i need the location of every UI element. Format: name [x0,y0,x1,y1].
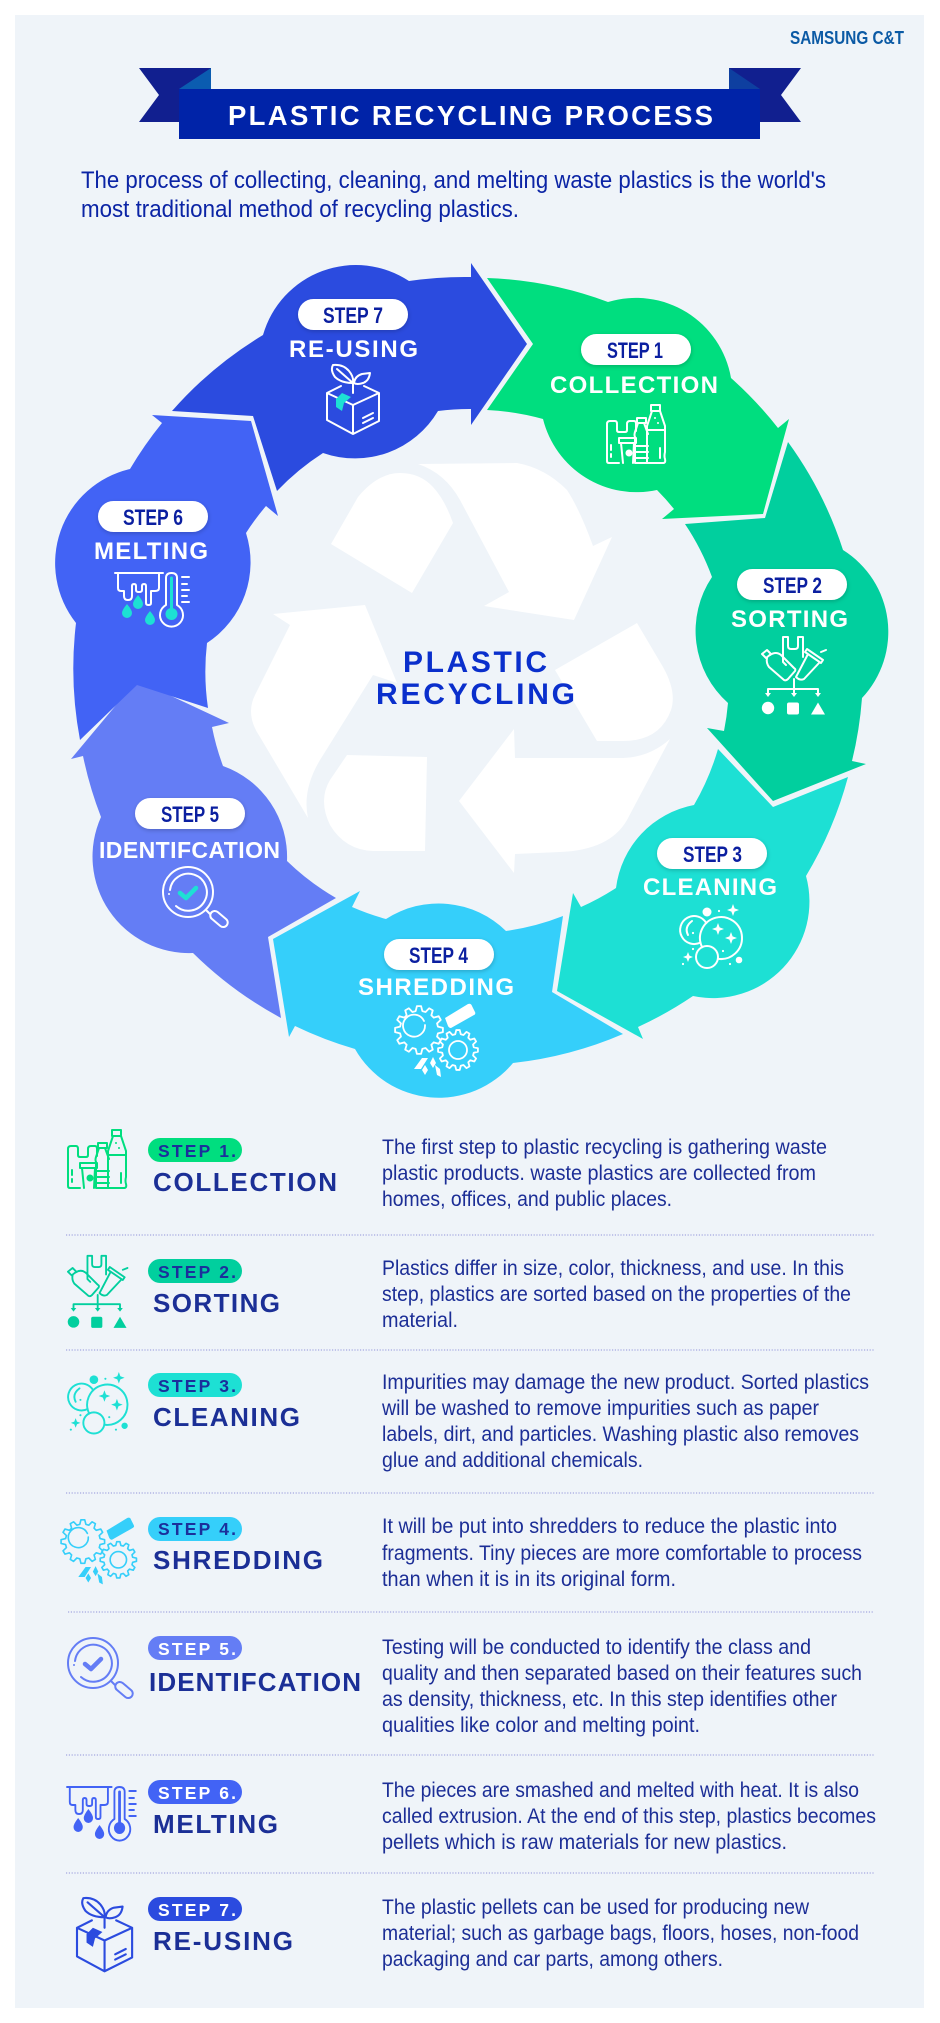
description [382,1636,862,1737]
ribbon fold left [179,68,211,89]
icon: re-using [77,1898,132,1971]
description: Plastics differ in size, color, thickness, and use. In this [382,1257,844,1280]
description [381,1371,869,1472]
center label: RECYCLING [376,678,575,711]
ring arrow: step 3 cleaning: STEP 3 [683,842,742,867]
icon: identification [163,867,230,929]
ring arrow: step 5 identification [71,680,336,1018]
ring arrow: step 1 collection: COLLECTION [550,372,718,399]
ring arrow: step 4 shredding [273,891,623,1098]
ribbon band [179,89,760,139]
icon: identification [68,1638,135,1700]
step badge: STEP 7. [158,1900,236,1920]
intro text [81,167,826,223]
description: Testing will be conducted to identify the class and [382,1636,811,1659]
step badge [148,1636,242,1660]
title banner [139,68,801,139]
ring arrow: step 7 re-using: RE-USING [289,336,418,363]
step badge: STEP 5. [158,1639,236,1659]
list row: step 7 [77,1896,859,1971]
description [382,1257,851,1332]
description: pellets which is raw materials for new plastics. [382,1831,787,1854]
ring arrow: step 5 identification: IDENTIFCATION [99,837,280,863]
step badge [148,1897,242,1921]
step name: CLEANING [153,1402,300,1432]
list row: step 4 [61,1515,862,1591]
description: plastic products. waste plastics are collected from [382,1162,816,1185]
description [382,1136,827,1211]
description: step, plastics are sorted based on the properties of the [382,1283,851,1306]
ring arrow: step 6 melting [55,415,278,740]
icon: collection [607,405,665,463]
description: The pieces are smashed and melted with heat. It is also [382,1779,859,1802]
description: as density, thickness, etc. In this step identifies other [382,1688,837,1711]
description [382,1515,862,1591]
step name: MELTING [153,1809,278,1839]
list row: step 5 [68,1636,862,1737]
description: Impurities may damage the new product. Sorted plastics [382,1371,869,1394]
step name: COLLECTION [153,1167,337,1197]
ribbon fold right [729,68,760,89]
list row: step 2 [68,1256,851,1332]
ring arrow: step 5 identification: STEP 5 [161,802,219,827]
icon: shredding [395,1004,478,1077]
step badge [148,1373,242,1397]
step name: SHREDDING [153,1545,323,1575]
description [382,1896,859,1971]
step badge: STEP 3. [158,1376,236,1396]
heading: PLASTIC RECYCLING PROCESS [228,100,713,131]
description: labels, dirt, and particles. Washing plastic also removes [382,1423,859,1446]
intro text: The process of collecting, cleaning, and melting waste plastics is the world's [81,167,826,194]
ribbon tail right [729,68,801,122]
step badge: STEP 6. [158,1783,236,1803]
description: material; such as garbage bags, floors, hoses, non-food [382,1922,859,1945]
description: The plastic pellets can be used for producing new [382,1896,810,1919]
ring arrow: step 1 collection [487,278,789,519]
description: The first step to plastic recycling is gathering waste [382,1136,827,1159]
logo: Samsung C&T: SAMSUNG C&T [790,28,904,48]
step badge: STEP 2. [158,1262,236,1282]
step badge [148,1259,242,1283]
description: homes, offices, and public places. [382,1188,672,1211]
description: material. [382,1309,458,1332]
ribbon tail left [139,68,211,122]
center label: PLASTIC [403,646,547,679]
list row: step 3 [68,1371,869,1472]
step badge [148,1517,242,1541]
description [382,1779,876,1854]
icon: melting [67,1787,136,1841]
icon: sorting [762,637,826,714]
icon: collection [68,1130,126,1188]
step badge: STEP 4. [158,1519,236,1539]
description: called extrusion. At the end of this step, plastics becomes [382,1805,876,1828]
central recycling symbol [251,463,673,873]
ring arrow: step 2 sorting [685,442,888,801]
ring arrow: step 3 cleaning: CLEANING [643,874,777,901]
icon: shredding [61,1518,136,1584]
description: packaging and car parts, among others. [382,1948,723,1971]
step name: IDENTIFCATION [149,1667,361,1697]
step badge [148,1780,242,1804]
intro text: most traditional method of recycling plastics. [81,196,519,223]
icon: cleaning [680,904,742,968]
step badge: STEP 1. [158,1141,236,1161]
ring arrow: step 1 collection: STEP 1 [607,338,663,363]
ring arrow: step 7 re-using: STEP 7 [323,303,383,328]
description: quality and then separated based on their features such [382,1662,862,1685]
icon: cleaning [68,1372,128,1433]
center label [376,646,575,711]
step name: RE-USING [153,1926,293,1956]
step name: SORTING [153,1288,280,1318]
ring arrow: step 4 shredding: STEP 4 [409,943,469,968]
description: fragments. Tiny pieces are more comfortable to process [382,1542,862,1565]
icon: melting [115,573,189,627]
description: than when it is in its original form. [382,1568,676,1591]
ring arrow: step 4 shredding: SHREDDING [358,974,514,1001]
icon: sorting [68,1256,127,1328]
description: will be washed to remove impurities such as paper [381,1397,819,1420]
description: glue and additional chemicals. [382,1449,643,1472]
ring arrow: step 7 re-using [172,263,527,491]
ring arrow: step 2 sorting: SORTING [731,606,848,633]
ring arrow: step 3 cleaning [557,749,848,1039]
ring arrow: step 6 melting: STEP 6 [123,505,183,530]
list row: step 6 [67,1779,876,1854]
step badge [148,1138,242,1162]
list row: step 1 [68,1130,827,1211]
description: It will be put into shredders to reduce the plastic into [382,1515,837,1538]
ring arrow: step 2 sorting: STEP 2 [763,573,822,598]
icon: re-using [327,365,379,434]
description: qualities like color and melting point. [382,1714,700,1737]
ring arrow: step 6 melting: MELTING [94,538,208,565]
